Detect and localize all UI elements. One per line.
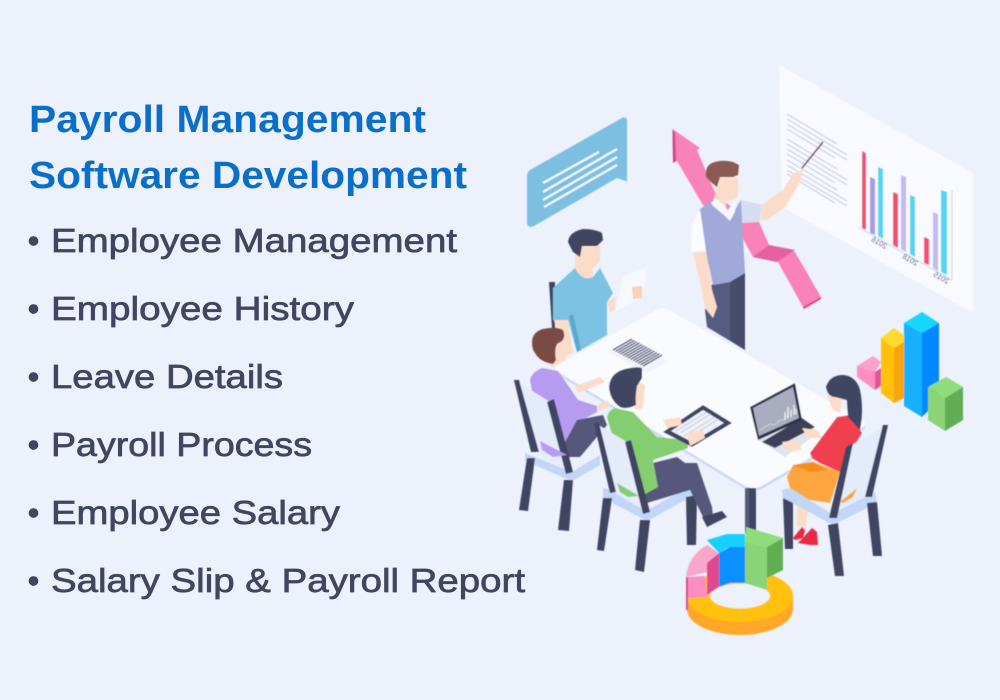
face bbox=[827, 395, 842, 413]
list item: salary slip and payroll report: Salary Slip & Payroll Report bbox=[51, 563, 526, 600]
presenter shirt and sleeves bbox=[691, 210, 708, 252]
grey trousers bbox=[557, 415, 607, 457]
illustration: isometric meeting scene bbox=[514, 65, 973, 635]
green segment bbox=[745, 527, 783, 590]
paper on table bbox=[607, 338, 668, 373]
pink segment bbox=[686, 545, 719, 610]
yellow block bbox=[881, 328, 904, 403]
green block bbox=[928, 377, 963, 431]
hands on keyboard bbox=[802, 428, 822, 438]
whiteboard bar chart: 2018 bbox=[901, 252, 920, 268]
red top bbox=[810, 415, 862, 472]
icon: laptop bbox=[750, 383, 818, 457]
skin arms bbox=[575, 377, 605, 393]
blue block bbox=[904, 312, 939, 417]
green shirt bbox=[607, 408, 688, 497]
icon: speech bubble bbox=[527, 117, 627, 227]
person: presenter bbox=[691, 142, 823, 350]
list item: payroll process: Payroll Process bbox=[51, 427, 312, 464]
shoe bbox=[702, 511, 727, 527]
orange skirt bbox=[787, 462, 840, 503]
face bbox=[635, 382, 645, 410]
blue shirt bbox=[553, 268, 613, 352]
pink block bbox=[857, 356, 881, 390]
person: man with tablet bbox=[549, 229, 647, 357]
title: Software Development bbox=[29, 155, 467, 197]
chair seat and legs bbox=[603, 482, 698, 521]
chair: right bbox=[782, 425, 888, 576]
panel: meeting table bbox=[556, 308, 865, 533]
brown hair bbox=[532, 328, 564, 364]
chair: left bbox=[514, 380, 600, 531]
panel: presentation whiteboard bbox=[779, 65, 973, 313]
whiteboard bar chart: 2016 bbox=[870, 235, 889, 251]
icon: tablet on table bbox=[663, 405, 732, 447]
chart: 3D bar blocks bbox=[857, 312, 963, 431]
chart: 3D donut bbox=[686, 527, 793, 635]
purple shirt bbox=[530, 368, 597, 457]
feature list bbox=[29, 223, 526, 600]
hair bbox=[568, 229, 603, 257]
lower arm bbox=[554, 320, 573, 357]
presenter head and neck bbox=[711, 178, 738, 208]
hands on tablet bbox=[663, 417, 682, 428]
arrow: pink trend arrow bbox=[672, 129, 821, 309]
chair back behind him bbox=[549, 282, 555, 328]
list item: leave details: Leave Details bbox=[51, 359, 283, 396]
red heels bbox=[793, 527, 805, 540]
dark hair bbox=[609, 367, 642, 408]
person: woman in red bbox=[782, 375, 862, 545]
held tablet bbox=[615, 267, 647, 312]
grey trousers bbox=[640, 457, 713, 517]
list item: employee history: Employee History bbox=[51, 291, 354, 328]
title bbox=[29, 99, 467, 197]
presenter hair bbox=[706, 161, 739, 187]
legs bbox=[797, 500, 810, 530]
pointer stick bbox=[802, 142, 823, 168]
whiteboard bar chart: 2015 bbox=[932, 270, 951, 286]
cyan and blue segment bbox=[707, 534, 745, 587]
title: Payroll Management bbox=[29, 99, 426, 141]
dark hair bbox=[826, 375, 862, 430]
chair back bbox=[595, 423, 647, 512]
whiteboard bar chart bbox=[858, 151, 952, 286]
presenter arms bbox=[693, 252, 717, 318]
whiteboard text lines bbox=[787, 114, 847, 206]
face bbox=[546, 343, 568, 367]
presenter vest bbox=[700, 200, 745, 285]
person: green shirt man bbox=[594, 367, 727, 572]
table leg bbox=[745, 488, 756, 533]
yellow ring bbox=[687, 570, 793, 635]
neck and face bbox=[575, 246, 600, 280]
list item: employee salary: Employee Salary bbox=[51, 495, 340, 532]
list item: employee management: Employee Management bbox=[51, 223, 458, 260]
presenter trousers bbox=[705, 273, 745, 350]
person: purple shirt man on chair bbox=[530, 328, 610, 457]
